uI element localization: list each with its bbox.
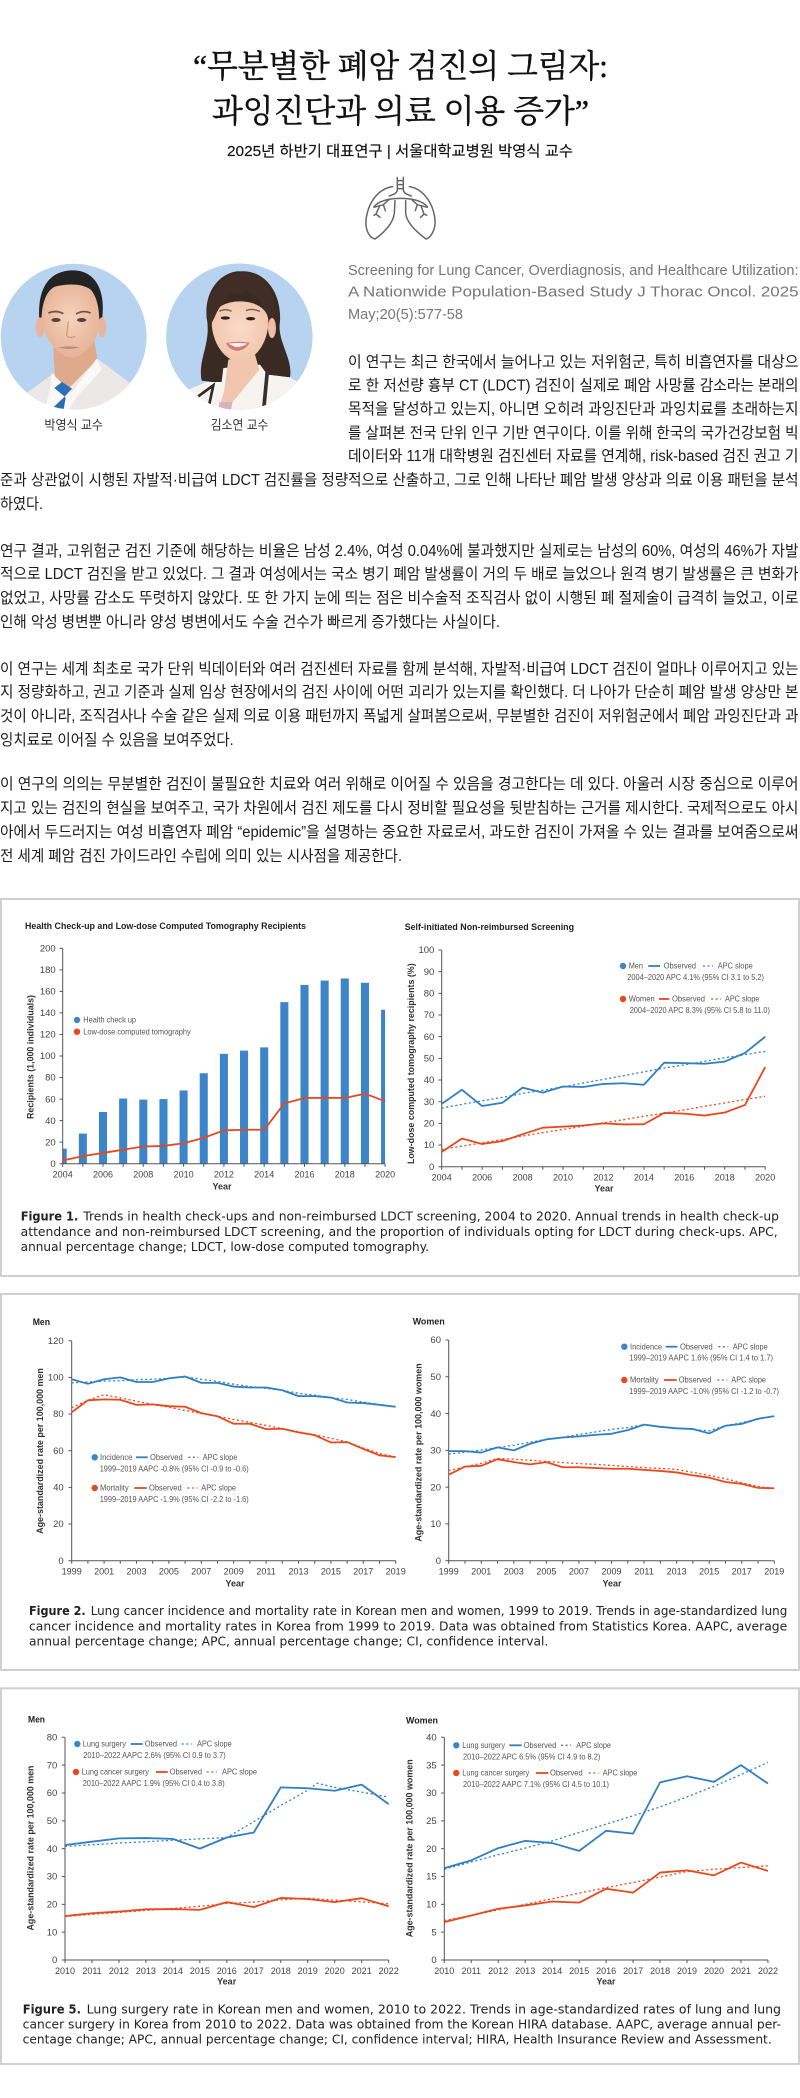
legend: Observed: [679, 1375, 712, 1385]
chart: men incidence and mortality: [33, 1317, 406, 1588]
chart: health check-up and LDCT recipients: 80: [45, 1073, 56, 1084]
legend: Observed: [145, 1739, 177, 1749]
chart: women incidence and mortality: 10: [430, 1519, 441, 1530]
chart: women lung surgery: 40: [426, 1732, 437, 1744]
caption: figure 5: cancer surgery in Korea from 2010 to 2022. Data was obtained from the Korean HIRA database. AAPC, average annual per-: [23, 2017, 781, 2031]
legend: APC slope: [576, 1740, 611, 1750]
chart: men lung surgery: 20: [47, 1900, 57, 1910]
paper citation: A Nationwide Population-Based Study J Thorac Oncol. 2025: [348, 285, 798, 301]
chart: men lung surgery: 40: [47, 1844, 57, 1855]
chart: men lung surgery: 2022: [379, 1966, 399, 1976]
chart: men incidence and mortality: 2009: [224, 1566, 244, 1576]
legend: APC slope: [222, 1767, 257, 1777]
chart: men incidence and mortality: 2007: [191, 1566, 211, 1576]
legend: 2010–2022 AAPC 2.6% (95% CI 0.9 to 3.7): [83, 1750, 226, 1760]
chart: health check-up and LDCT recipients: 2012: [214, 1170, 234, 1180]
chart: women incidence and mortality: 50: [430, 1372, 441, 1383]
paper citation: May;20(5):577-58: [348, 307, 463, 323]
caption: figure 1: annual percentage change; LDCT, low-dose computed tomography.: [21, 1240, 429, 1254]
chart: health check-up and LDCT recipients: 2014: [254, 1170, 274, 1180]
legend: Low-dose computed tomography: [83, 1026, 191, 1036]
legend: [453, 1740, 638, 1789]
chart: men lung surgery: 2016: [217, 1966, 237, 1976]
chart: self-initiated non-reimbursed screening: 20: [424, 1118, 434, 1130]
legend: APC slope: [733, 1341, 768, 1351]
chart: women lung surgery: 2011: [462, 1966, 481, 1976]
chart: women lung surgery: 2017: [623, 1966, 643, 1976]
chart: self-initiated non-reimbursed screening: 2008: [513, 1172, 533, 1182]
caption: figure 5: [23, 2002, 781, 2046]
chart: women lung surgery: Women: [406, 1715, 438, 1726]
chart: health check-up and LDCT recipients: 20: [45, 1137, 56, 1148]
chart: women lung surgery: 10: [426, 1900, 437, 1910]
paper citation: Screening for Lung Cancer, Overdiagnosis, and Healthcare Utilization:: [348, 263, 798, 279]
chart: self-initiated non-reimbursed screening: [405, 922, 775, 1194]
chart: health check-up and LDCT recipients: 2008: [133, 1170, 153, 1180]
chart: men lung surgery: [26, 1715, 399, 1986]
chart: women lung surgery: 30: [426, 1788, 437, 1799]
chart: men incidence and mortality: 20: [53, 1519, 64, 1530]
chart: men incidence and mortality: 1999: [62, 1566, 82, 1576]
chart: health check-up and LDCT recipients: 160: [40, 987, 56, 998]
legend: 2010–2022 AAPC 1.9% (95% CI 0.4 to 3.8): [83, 1778, 225, 1788]
caption: figure 2: annual percentage change; APC, annual percentage change; CI, confidence interval.: [29, 1635, 548, 1649]
chart: women lung surgery: 2018: [650, 1966, 670, 1976]
chart: health check-up and LDCT recipients: 140: [40, 1008, 56, 1019]
chart: women incidence and mortality: 60: [430, 1335, 441, 1346]
chart: self-initiated non-reimbursed screening: 100: [418, 945, 434, 956]
chart: self-initiated non-reimbursed screening: 80: [424, 988, 434, 1000]
paragraph 3: [0, 660, 798, 749]
legend: Observed: [150, 1452, 183, 1462]
chart: health check-up and LDCT recipients: 2018: [335, 1170, 355, 1180]
caption: figure 5: centage change; APC, annual percentage change; CI, confidence interval; HIRA, Health Insurance Review and Assessment.: [23, 2032, 772, 2046]
caption: figure 2: cancer incidence and mortality rates in Korea from 1999 to 2019. Data was obtained from Statistics Korea. AAPC, average: [29, 1619, 787, 1633]
chart: women incidence and mortality: Year: [602, 1578, 622, 1588]
legend: Mortality: [630, 1375, 659, 1385]
chart: men incidence and mortality: 0: [58, 1556, 64, 1567]
chart: men lung surgery: 30: [47, 1872, 57, 1883]
icon: lungs: [366, 177, 435, 239]
chart: self-initiated non-reimbursed screening: 2010: [553, 1172, 573, 1182]
title: “무분별한 폐암 검진의 그림자:: [193, 48, 608, 84]
paragraph 4: 전 세계 폐암 검진 가이드라인 수립에 의미 있는 시사점을 제공한다.: [0, 847, 402, 865]
chart: women incidence and mortality: 30: [430, 1446, 441, 1457]
chart: men lung surgery: Men: [28, 1715, 45, 1726]
legend: Lung cancer surgery: [82, 1767, 150, 1777]
chart: men lung surgery: 2019: [298, 1966, 318, 1976]
chart: women incidence and mortality: [413, 1317, 784, 1588]
chart: men incidence and mortality: 100: [48, 1373, 64, 1384]
chart: women lung surgery: Year: [596, 1976, 616, 1986]
chart: men lung surgery: 2011: [82, 1966, 102, 1976]
chart: men lung surgery: 50: [47, 1816, 57, 1827]
legend: Observed: [170, 1767, 202, 1777]
chart: women lung surgery: 20: [426, 1844, 437, 1855]
caption: figure 5: Figure 5.: [23, 2002, 81, 2016]
chart: men lung surgery: Year: [217, 1976, 237, 1986]
chart: men incidence and mortality: 2003: [126, 1566, 147, 1576]
chart: women incidence and mortality: 2013: [667, 1566, 687, 1576]
chart: self-initiated non-reimbursed screening: 70: [424, 1010, 434, 1021]
chart: self-initiated non-reimbursed screening: Year: [594, 1184, 614, 1194]
legend: 2010–2022 AAPC 7.1% (95% CI 4.5 to 10.1): [463, 1779, 609, 1789]
chart: men incidence and mortality: 60: [53, 1446, 64, 1457]
chart: men lung surgery: 2020: [325, 1966, 345, 1976]
chart: women lung surgery: Age-standardized rate per 100,000 women: [405, 1759, 416, 1937]
legend: Mortality: [100, 1483, 129, 1493]
chart: men incidence and mortality: 2015: [321, 1566, 341, 1576]
legend: APC slope: [725, 994, 760, 1004]
chart: health check-up and LDCT recipients: 2020: [375, 1170, 395, 1180]
chart: health check-up and LDCT recipients: 100: [40, 1051, 56, 1062]
chart: self-initiated non-reimbursed screening: 60: [424, 1032, 434, 1043]
chart: men incidence and mortality: Age-standardized rate per 100,000 men: [35, 1368, 46, 1534]
legend: [620, 961, 770, 1015]
paragraph 2: [0, 542, 798, 631]
legend: 1999–2019 AAPC -1.0% (95% CI -1.2 to -0.7): [629, 1386, 779, 1396]
chart: self-initiated non-reimbursed screening: 2006: [472, 1172, 492, 1182]
legend: APC slope: [203, 1452, 238, 1462]
chart: women incidence and mortality: 2005: [536, 1566, 556, 1576]
legend: Health check up: [83, 1015, 136, 1025]
chart: women lung surgery: 15: [426, 1872, 437, 1883]
title: 과잉진단과 의료 이용 증가”: [212, 93, 589, 129]
chart: men lung surgery: 80: [47, 1732, 57, 1744]
legend: 1999–2019 AAPC -1.9% (95% CI -2.2 to -1.6): [100, 1494, 249, 1504]
legend: APC slope: [201, 1483, 236, 1493]
legend: [621, 1341, 779, 1396]
caption: figure 1: Figure 1.: [21, 1210, 78, 1224]
chart: self-initiated non-reimbursed screening: 2016: [674, 1172, 694, 1182]
chart: health check-up and LDCT recipients: 2010: [174, 1170, 194, 1180]
chart: men lung surgery: 2010: [55, 1966, 75, 1976]
paragraph 1: [0, 353, 798, 513]
chart: self-initiated non-reimbursed screening: 2004: [432, 1172, 452, 1182]
chart: women lung surgery: 5: [431, 1927, 437, 1938]
legend: Observed: [550, 1768, 583, 1778]
caption: figure 2: Lung cancer incidence and mortality rate in Korean men and women, 1999 to 2019. Trends in age-standardized lung: [91, 1604, 787, 1618]
chart: women incidence and mortality: 2003: [504, 1566, 524, 1576]
chart: self-initiated non-reimbursed screening: 30: [424, 1097, 434, 1108]
chart: self-initiated non-reimbursed screening: 50: [424, 1054, 434, 1064]
subtitle: 2025년 하반기 대표연구 | 서울대학교병원 박영식 교수: [227, 143, 573, 160]
legend: [92, 1452, 249, 1504]
legend: 2010–2022 APC 6.5% (95% CI 4.9 to 8.2): [463, 1751, 601, 1761]
chart: self-initiated non-reimbursed screening: 0: [429, 1162, 434, 1173]
chart: women incidence and mortality: Women: [413, 1317, 445, 1328]
name: Park: 박영식 교수: [44, 418, 103, 432]
legend: Observed: [524, 1740, 557, 1750]
chart: men lung surgery: 2013: [136, 1966, 156, 1976]
panel: figure 5: [1, 1688, 799, 2064]
chart: men lung surgery: 2018: [271, 1966, 291, 1976]
legend: Lung cancer surgery: [462, 1768, 530, 1778]
title: [193, 48, 608, 129]
legend: Observed: [664, 961, 696, 971]
chart: women lung surgery: 25: [426, 1816, 437, 1827]
chart: men incidence and mortality: 2005: [159, 1566, 179, 1576]
legend: 1999–2019 AAPC -0.8% (95% CI -0.9 to -0.6): [100, 1463, 249, 1473]
chart: men incidence and mortality: 2011: [256, 1566, 276, 1576]
chart: self-initiated non-reimbursed screening: 40: [424, 1075, 434, 1086]
legend: APC slope: [197, 1739, 232, 1749]
paragraph 2: 인해 악성 병변뿐 아니라 양성 병변에서도 수술 건수가 빠르게 증가했다는 사실이다.: [0, 613, 500, 631]
chart: health check-up and LDCT recipients: 0: [50, 1159, 56, 1170]
chart: women incidence and mortality: 2001: [471, 1566, 491, 1576]
chart: women lung surgery: 2020: [704, 1966, 724, 1976]
chart: men incidence and mortality: 2017: [353, 1566, 373, 1576]
chart: self-initiated non-reimbursed screening: Low-dose computed tomography recipients (%): [406, 963, 417, 1164]
chart: men lung surgery: 2012: [109, 1966, 129, 1976]
caption: figure 5: Lung surgery rate in Korean men and women, 2010 to 2022. Trends in age-standardized rates of lung and lung: [87, 2002, 781, 2016]
legend: Women: [629, 994, 655, 1004]
caption: figure 2: [29, 1604, 787, 1649]
chart: women lung surgery: 2021: [731, 1966, 751, 1976]
panel: figure 2: [1, 1294, 799, 1670]
chart: women incidence and mortality: 40: [430, 1409, 441, 1420]
chart: men incidence and mortality: 2013: [288, 1566, 309, 1576]
chart: self-initiated non-reimbursed screening: 10: [424, 1140, 434, 1151]
panel: figure 1: [1, 899, 799, 1276]
chart: women lung surgery: 2015: [569, 1966, 589, 1976]
chart: men lung surgery: 70: [47, 1760, 57, 1771]
chart: health check-up and LDCT recipients: 2016: [294, 1170, 315, 1180]
chart: men lung surgery: 60: [47, 1788, 57, 1799]
chart: women incidence and mortality: 2011: [634, 1566, 654, 1576]
chart: women incidence and mortality: 2007: [569, 1566, 589, 1576]
chart: women lung surgery: 2019: [677, 1966, 697, 1976]
paper citation: [348, 263, 798, 323]
chart: health check-up and LDCT recipients: Year: [212, 1182, 232, 1192]
legend: Observed: [672, 994, 705, 1004]
chart: men lung surgery: 2014: [163, 1966, 183, 1976]
chart: health check-up and LDCT recipients: 2004: [53, 1170, 73, 1180]
caption: figure 1: [21, 1210, 779, 1254]
chart: men incidence and mortality: Year: [225, 1578, 245, 1588]
chart: women incidence and mortality: 2017: [732, 1566, 752, 1576]
chart: health check-up and LDCT recipients: 180: [40, 965, 56, 976]
chart: women incidence and mortality: 20: [430, 1482, 441, 1493]
chart: men lung surgery: 2015: [190, 1966, 210, 1976]
chart: women lung surgery: 2014: [542, 1966, 562, 1976]
chart: men incidence and mortality: 2001: [94, 1566, 114, 1576]
chart: women incidence and mortality: 0: [436, 1556, 441, 1567]
chart: women lung surgery: [405, 1715, 778, 1986]
legend: Men: [629, 961, 643, 971]
chart: women incidence and mortality: 2019: [764, 1566, 784, 1576]
caption: figure 1: attendance and non-reimbursed LDCT screening, and the proportion of individuals opting for LDCT during check-ups. APC,: [21, 1225, 778, 1239]
legend: Incidence: [100, 1452, 133, 1462]
chart: men incidence and mortality: 80: [53, 1409, 64, 1420]
chart: men lung surgery: 2021: [352, 1966, 372, 1976]
chart: women incidence and mortality: 2015: [699, 1566, 719, 1576]
chart: men lung surgery: 2017: [244, 1966, 264, 1976]
legend: 1999–2019 AAPC 1.6% (95% CI 1.4 to 1.7): [629, 1353, 773, 1363]
chart: self-initiated non-reimbursed screening: 2018: [715, 1172, 735, 1182]
legend: [73, 1739, 257, 1788]
chart: men incidence and mortality: Men: [33, 1317, 50, 1328]
legend: Lung surgery: [462, 1740, 506, 1750]
chart: women incidence and mortality: 2009: [601, 1566, 622, 1576]
chart: self-initiated non-reimbursed screening: 2014: [634, 1172, 654, 1182]
chart: women lung surgery: 2013: [515, 1966, 535, 1976]
paragraph 4: [0, 775, 798, 865]
chart: women lung surgery: 35: [426, 1760, 437, 1771]
chart: health check-up and LDCT recipients: [25, 921, 395, 1192]
paragraph 3: 잉치료로 이어질 수 있음을 보여주었다.: [0, 731, 234, 749]
legend: APC slope: [731, 1375, 766, 1385]
paragraph 1: 하였다.: [0, 495, 43, 513]
chart: health check-up and LDCT recipients: Health Check-up and Low-dose Computed Tomography Recipients: [25, 921, 306, 932]
chart: women lung surgery: 0: [431, 1955, 437, 1966]
chart: men incidence and mortality: 120: [48, 1336, 64, 1347]
chart: self-initiated non-reimbursed screening: 2012: [593, 1172, 614, 1182]
chart: self-initiated non-reimbursed screening: 90: [424, 967, 434, 978]
chart: men lung surgery: Age-standardized rate per 100,000 men: [26, 1765, 37, 1930]
photo: professor Kim: [166, 263, 313, 415]
legend: Incidence: [630, 1341, 662, 1351]
caption: figure 1: Trends in health check-ups and non-reimbursed LDCT screening, 2004 to 2020. Annual trends in health check-up: [82, 1210, 779, 1224]
chart: health check-up and LDCT recipients: 120: [40, 1030, 56, 1041]
chart: men incidence and mortality: 2019: [386, 1566, 406, 1576]
legend: APC slope: [603, 1768, 638, 1778]
legend: Lung surgery: [83, 1739, 127, 1749]
photo: professor Park: [1, 264, 147, 415]
legend: Observed: [680, 1341, 713, 1351]
legend: Observed: [149, 1483, 182, 1493]
chart: health check-up and LDCT recipients: 60: [45, 1094, 56, 1105]
chart: women lung surgery: 2012: [488, 1966, 508, 1976]
chart: women lung surgery: 2022: [758, 1966, 778, 1976]
chart: women lung surgery: 2016: [596, 1966, 616, 1976]
chart: self-initiated non-reimbursed screening: 2020: [755, 1172, 775, 1182]
chart: health check-up and LDCT recipients: 40: [45, 1116, 56, 1127]
name: Kim: 김소연 교수: [211, 418, 268, 432]
chart: health check-up and LDCT recipients: 200: [40, 944, 56, 954]
chart: self-initiated non-reimbursed screening: Self-initiated Non-reimbursed Screening: [405, 922, 574, 933]
chart: men lung surgery: 0: [52, 1955, 57, 1966]
legend: [74, 1015, 191, 1036]
legend: 2004–2020 APC 8.3% (95% CI 5.8 to 11.0): [630, 1005, 770, 1015]
legend: APC slope: [718, 961, 753, 971]
chart: women incidence and mortality: 1999: [439, 1566, 459, 1576]
chart: health check-up and LDCT recipients: 2006: [93, 1170, 113, 1180]
chart: women lung surgery: 2010: [434, 1966, 454, 1976]
chart: men incidence and mortality: 40: [53, 1483, 64, 1494]
chart: health check-up and LDCT recipients: Recipients (1,000 individuals): [26, 995, 36, 1119]
caption: figure 2: Figure 2.: [29, 1604, 86, 1618]
legend: 2004–2020 APC 4.1% (95% CI 3.1 to 5.2): [627, 972, 764, 982]
chart: men lung surgery: 10: [47, 1927, 57, 1938]
chart: women incidence and mortality: Age-standardized rate per 100,000 women: [413, 1363, 424, 1542]
